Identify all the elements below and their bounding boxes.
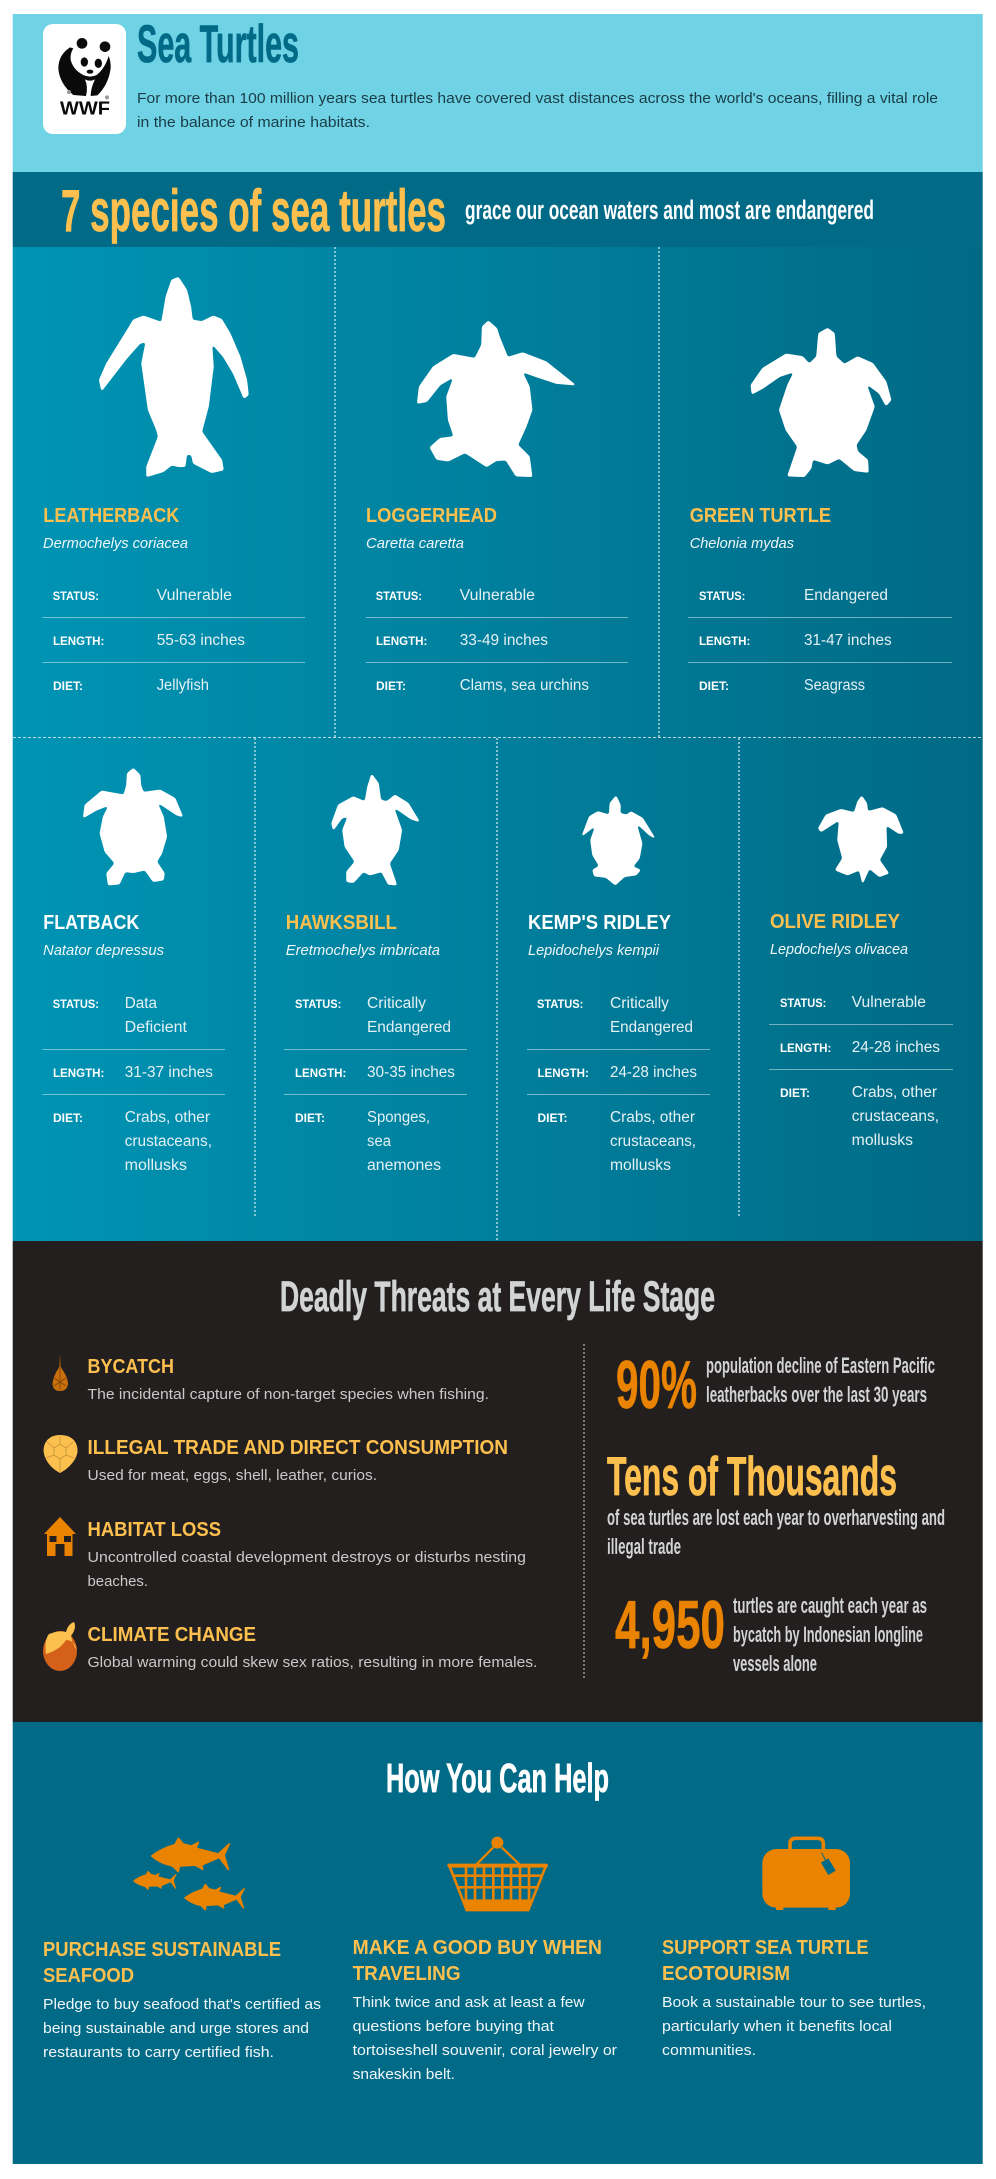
intro text: For more than 100 million years sea turtles have covered vast distances across the world's oceans, filling a vital role xyxy=(137,90,938,107)
card: kemp's ridley: mollusks xyxy=(610,1157,671,1174)
card: flatback: Deficient xyxy=(125,1019,188,1036)
help heading: How You Can Help xyxy=(386,1755,609,1801)
card: flatback: Crabs, other xyxy=(125,1109,210,1126)
card: green turtle: Endangered xyxy=(804,587,888,604)
card: hawksbill: STATUS: xyxy=(295,997,341,1011)
icon: suitcase xyxy=(762,1838,850,1910)
card: olive ridley: Vulnerable xyxy=(852,994,926,1011)
card: hawksbill: Endangered xyxy=(367,1019,451,1036)
card: loggerhead xyxy=(366,321,628,694)
help: good buy: TRAVELING xyxy=(353,1963,461,1985)
stat: 4,950 xyxy=(615,1587,927,1676)
card: hawksbill xyxy=(284,774,467,1174)
help: ecotourism: ECOTOURISM xyxy=(662,1963,790,1985)
threat: illegal trade: ILLEGAL TRADE AND DIRECT CONSUMPTION xyxy=(88,1437,508,1459)
card: olive ridley: 24-28 inches xyxy=(852,1039,940,1056)
card: hawksbill: HAWKSBILL xyxy=(286,912,397,934)
card: hawksbill: DIET: xyxy=(295,1111,325,1125)
threat: habitat loss xyxy=(44,1517,526,1590)
threats heading: Deadly Threats at Every Life Stage xyxy=(280,1273,715,1321)
help: good buy: Think twice and ask at least a few xyxy=(353,1994,585,2011)
threat: bycatch: BYCATCH xyxy=(88,1356,174,1378)
card: kemp's ridley: KEMP'S RIDLEY xyxy=(528,912,672,934)
card: kemp's ridley xyxy=(527,796,710,1174)
card: loggerhead: LOGGERHEAD xyxy=(366,505,497,527)
icon: fish xyxy=(133,1838,244,1910)
icon: basket xyxy=(449,1837,546,1911)
card: kemp's ridley: LENGTH: xyxy=(538,1066,589,1080)
card: leatherback: Vulnerable xyxy=(157,587,232,604)
help: ecotourism: particularly when it benefits local xyxy=(662,2018,892,2035)
threat: climate change: Global warming could skew sex ratios, resulting in more females. xyxy=(88,1654,538,1671)
card: flatback: Natator depressus xyxy=(43,942,164,959)
card: hawksbill: Critically xyxy=(367,995,426,1012)
help: good buy: questions before buying that xyxy=(353,2018,555,2035)
card: flatback: DIET: xyxy=(53,1111,83,1125)
card: flatback: Data xyxy=(125,995,157,1012)
icon: flatback turtle xyxy=(83,768,183,885)
intro text: in the balance of marine habitats. xyxy=(137,114,370,131)
icon: house xyxy=(44,1517,76,1556)
help: good buy: snakeskin belt. xyxy=(353,2066,455,2083)
card: hawksbill: 30-35 inches xyxy=(367,1064,455,1081)
help: seafood: SEAFOOD xyxy=(43,1965,134,1987)
card: green turtle: Chelonia mydas xyxy=(690,535,794,552)
stat: 4,950: vessels alone xyxy=(733,1651,817,1676)
card: green turtle: DIET: xyxy=(699,679,729,693)
card: green turtle: LENGTH: xyxy=(699,634,750,648)
stat: 90%: 90% xyxy=(616,1347,697,1423)
card: kemp's ridley: 24-28 inches xyxy=(610,1064,697,1081)
help: seafood xyxy=(43,1838,321,2061)
card: flatback: 31-37 inches xyxy=(125,1064,213,1081)
card: kemp's ridley: Endangered xyxy=(610,1019,693,1036)
card: green turtle: GREEN TURTLE xyxy=(690,505,831,527)
card: flatback: FLATBACK xyxy=(43,912,140,934)
card: olive ridley: Lepdochelys olivacea xyxy=(770,941,908,958)
help: good buy: MAKE A GOOD BUY WHEN xyxy=(353,1937,602,1959)
stat: 90% xyxy=(616,1347,935,1423)
card: olive ridley: mollusks xyxy=(852,1132,913,1149)
card: olive ridley: DIET: xyxy=(780,1086,810,1100)
icon: net xyxy=(52,1354,68,1391)
icon: hatching egg xyxy=(43,1622,77,1671)
card: olive ridley: OLIVE RIDLEY xyxy=(770,911,901,933)
card: kemp's ridley: Lepidochelys kempii xyxy=(528,942,660,959)
stat: tens of thousands xyxy=(607,1445,945,1559)
help: seafood: being sustainable and urge stores and xyxy=(43,2020,309,2037)
threat: bycatch: The incidental capture of non-target species when fishing. xyxy=(88,1386,489,1403)
card: olive ridley: Crabs, other xyxy=(852,1084,937,1101)
card: leatherback: Jellyfish xyxy=(157,677,209,694)
help: seafood: Pledge to buy seafood that's certified as xyxy=(43,1996,321,2013)
icon: leatherback turtle xyxy=(99,277,248,477)
card: kemp's ridley: crustaceans, xyxy=(610,1133,696,1150)
icon: olive ridley turtle xyxy=(818,796,903,883)
card: hawksbill: Eretmochelys imbricata xyxy=(286,942,440,959)
card: loggerhead: DIET: xyxy=(376,679,406,693)
banner: 7 species: 7 species of sea turtles xyxy=(61,178,446,244)
title: Sea Turtles xyxy=(137,15,299,74)
card: leatherback: DIET: xyxy=(53,679,83,693)
icon: turtle shell xyxy=(44,1435,78,1473)
card: flatback: LENGTH: xyxy=(53,1066,104,1080)
header panel xyxy=(13,14,983,172)
card: leatherback xyxy=(42,277,305,694)
banner: 7 species xyxy=(13,172,983,247)
card: hawksbill: LENGTH: xyxy=(295,1066,346,1080)
card: kemp's ridley: STATUS: xyxy=(537,997,583,1011)
intro text xyxy=(137,90,938,131)
card: hawksbill: sea xyxy=(367,1133,391,1150)
threat: habitat loss: HABITAT LOSS xyxy=(88,1519,221,1541)
icon: loggerhead turtle xyxy=(417,321,575,477)
help: ecotourism xyxy=(662,1838,926,2059)
threat: illegal trade xyxy=(44,1435,508,1484)
threat: habitat loss: Uncontrolled coastal development destroys or disturbs nesting xyxy=(88,1549,526,1566)
threat: bycatch xyxy=(52,1354,489,1403)
threat: climate change xyxy=(43,1622,538,1671)
WWF logo xyxy=(43,24,126,134)
species panel background xyxy=(13,247,983,1241)
card: flatback: crustaceans, xyxy=(125,1133,212,1150)
card: leatherback: STATUS: xyxy=(53,589,99,603)
card: hawksbill: Sponges, xyxy=(367,1109,430,1126)
card: hawksbill: anemones xyxy=(367,1157,441,1174)
card: flatback: mollusks xyxy=(125,1157,187,1174)
help: seafood: restaurants to carry certified fish. xyxy=(43,2044,274,2061)
card: flatback xyxy=(42,768,225,1174)
card: loggerhead: 33-49 inches xyxy=(460,632,548,649)
card: kemp's ridley: Critically xyxy=(610,995,669,1012)
panel: threats xyxy=(13,1241,983,1722)
card: olive ridley xyxy=(769,796,953,1149)
panel: how you can help xyxy=(13,1722,983,2164)
card: green turtle: STATUS: xyxy=(699,589,745,603)
stat: tens of thousands: illegal trade xyxy=(607,1534,681,1559)
stat: 4,950: 4,950 xyxy=(615,1587,725,1663)
icon: green turtle xyxy=(751,328,891,477)
help: good buy: tortoiseshell souvenir, coral jewelry or xyxy=(353,2042,617,2059)
card: loggerhead: Vulnerable xyxy=(460,587,535,604)
help: seafood: PURCHASE SUSTAINABLE xyxy=(43,1939,281,1961)
card: leatherback: LENGTH: xyxy=(53,634,104,648)
help: ecotourism: SUPPORT SEA TURTLE xyxy=(662,1937,868,1959)
WWF logo: WWF xyxy=(60,97,110,118)
icon: hawksbill turtle xyxy=(332,774,419,885)
card: olive ridley: LENGTH: xyxy=(780,1041,831,1055)
threat: habitat loss: beaches. xyxy=(88,1573,148,1590)
threat: illegal trade: Used for meat, eggs, shell, leather, curios. xyxy=(88,1467,377,1484)
card: kemp's ridley: DIET: xyxy=(538,1111,568,1125)
card: loggerhead: LENGTH: xyxy=(376,634,427,648)
card: olive ridley: crustaceans, xyxy=(852,1108,939,1125)
card: leatherback: LEATHERBACK xyxy=(43,505,180,527)
card: loggerhead: Caretta caretta xyxy=(366,535,464,552)
card: flatback: STATUS: xyxy=(53,997,99,1011)
card: green turtle: Seagrass xyxy=(804,677,865,694)
icon: kemp's ridley turtle xyxy=(582,796,655,885)
card: green turtle xyxy=(688,328,952,694)
card: loggerhead: STATUS: xyxy=(376,589,422,603)
card: kemp's ridley: Crabs, other xyxy=(610,1109,695,1126)
card: loggerhead: Clams, sea urchins xyxy=(460,677,589,694)
help: ecotourism: Book a sustainable tour to see turtles, xyxy=(662,1994,926,2011)
card: olive ridley: STATUS: xyxy=(780,996,826,1010)
help: good buy xyxy=(353,1837,617,2083)
card: green turtle: 31-47 inches xyxy=(804,632,892,649)
card: leatherback: Dermochelys coriacea xyxy=(43,535,188,552)
help: ecotourism: communities. xyxy=(662,2042,756,2059)
threat: climate change: CLIMATE CHANGE xyxy=(88,1624,256,1646)
card: leatherback: 55-63 inches xyxy=(157,632,245,649)
